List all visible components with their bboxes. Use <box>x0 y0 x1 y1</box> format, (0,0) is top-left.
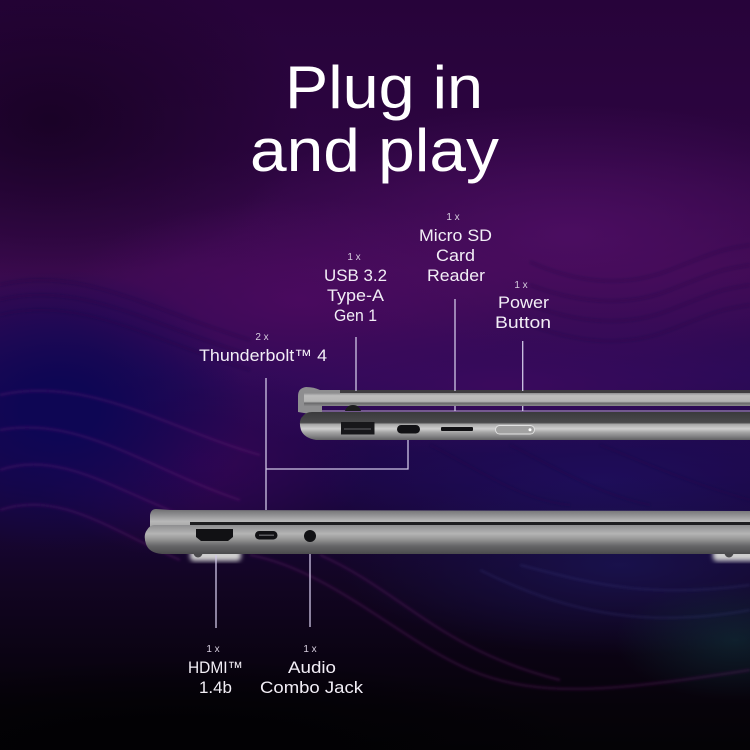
line: Thunderbolt bracket <box>266 378 408 510</box>
label: Micro SD Card Reader: Micro SD <box>419 227 492 245</box>
lower laptop base <box>145 525 750 554</box>
label: Power Button: Button <box>495 314 551 332</box>
label: HDMI 1.4b <box>188 644 243 697</box>
icon: USB-C port <box>255 531 278 540</box>
icon: USB-C port <box>397 425 420 434</box>
lower laptop side view <box>145 509 750 561</box>
label: Thunderbolt 4: Thunderbolt™ 4 <box>199 347 327 365</box>
icon: power button <box>496 426 534 434</box>
title <box>250 54 499 184</box>
icon: HDMI port <box>196 529 233 541</box>
label: USB 3.2 Type-A Gen 1: 1 x <box>347 252 361 263</box>
label: HDMI 1.4b: HDMI™ <box>188 659 243 677</box>
connector lines <box>216 299 523 628</box>
line: USB <box>355 337 357 391</box>
background wave streaks <box>0 245 750 689</box>
label: USB 3.2 Type-A Gen 1 <box>324 252 387 325</box>
label: Thunderbolt 4 <box>199 332 327 365</box>
label: USB 3.2 Type-A Gen 1: Type-A <box>327 287 384 305</box>
lower laptop lid <box>150 509 750 528</box>
label: HDMI 1.4b: 1 x <box>206 644 220 655</box>
upper laptop lid <box>298 387 750 416</box>
label: Audio Combo Jack <box>260 644 364 697</box>
icon: micro SD slot <box>441 427 473 431</box>
title: Plug in <box>285 54 483 121</box>
label: Audio Combo Jack: 1 x <box>303 644 317 655</box>
lid shadow strip <box>190 522 750 526</box>
line: power <box>522 341 524 411</box>
title: and play <box>250 117 499 184</box>
line: micro SD <box>454 299 456 411</box>
label: Micro SD Card Reader: 1 x <box>446 212 460 223</box>
line: audio <box>309 554 311 627</box>
label: Power Button: 1 x <box>514 280 528 291</box>
icon: USB-A port <box>341 422 374 434</box>
label: Power Button: Power <box>498 294 550 312</box>
label: Micro SD Card Reader: Card <box>436 247 475 265</box>
icon: audio jack <box>304 530 316 542</box>
line: HDMI <box>215 555 217 628</box>
label: Power Button <box>495 280 551 332</box>
label: USB 3.2 Type-A Gen 1: Gen 1 <box>334 307 377 325</box>
label: Micro SD Card Reader <box>419 212 492 285</box>
upper laptop base <box>300 412 750 440</box>
upper laptop side view <box>298 387 750 440</box>
label: Audio Combo Jack: Combo Jack <box>260 679 364 697</box>
label: USB 3.2 Type-A Gen 1: USB 3.2 <box>324 267 387 285</box>
left rubber foot <box>190 549 241 561</box>
label: Thunderbolt 4: 2 x <box>255 332 269 343</box>
label: HDMI 1.4b: 1.4b <box>199 679 232 697</box>
label: Micro SD Card Reader: Reader <box>427 267 486 285</box>
right rubber foot <box>713 549 750 561</box>
label: Audio Combo Jack: Audio <box>288 659 336 677</box>
